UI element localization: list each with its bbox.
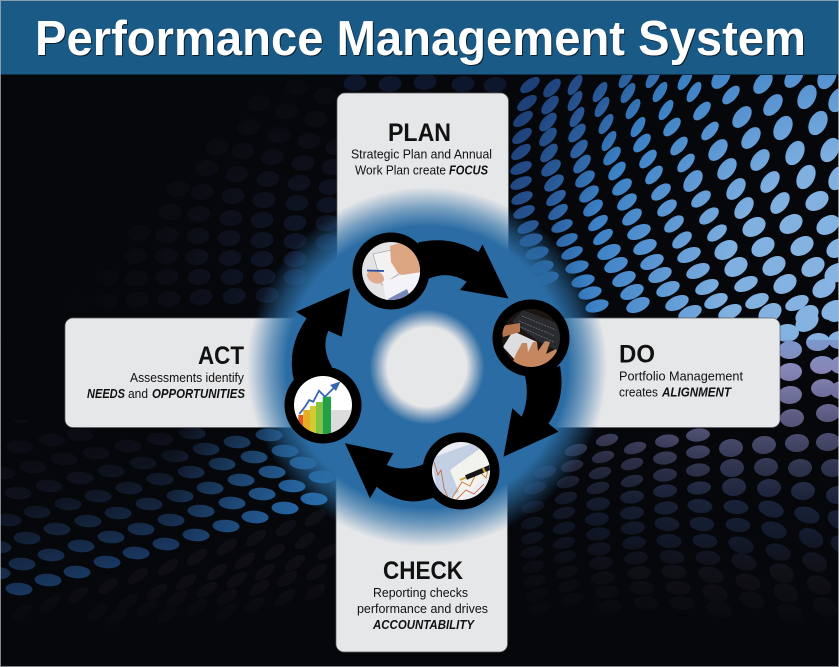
do text: Portfolio Management	[619, 370, 744, 384]
plan text: Work Plan create	[355, 164, 446, 178]
plan heading: PLAN	[388, 119, 451, 147]
photo: rising bar chart	[284, 366, 362, 444]
panel: do	[530, 318, 780, 428]
act text	[87, 371, 246, 401]
title: Performance Management System	[35, 12, 806, 66]
arrow: do to check	[504, 366, 562, 457]
title banner	[0, 0, 839, 74]
check text	[357, 586, 488, 632]
check heading: CHECK	[383, 557, 463, 585]
do text: creates	[619, 386, 658, 400]
act heading: ACT	[198, 342, 244, 370]
check text: performance and drives	[357, 602, 488, 616]
panel: plan	[337, 93, 508, 333]
photo: hands on keyboard	[492, 300, 570, 376]
do text	[619, 370, 744, 400]
cycle arrows	[292, 240, 562, 501]
check text: ACCOUNTABILITY	[372, 618, 476, 632]
do text: ALIGNMENT	[661, 386, 732, 400]
photo: person writing	[352, 232, 430, 310]
background dot pattern	[0, 75, 839, 596]
act text: NEEDS	[87, 387, 126, 401]
panel: check	[336, 420, 508, 652]
arrow: plan to do	[418, 240, 508, 298]
plan text	[351, 148, 492, 178]
act text: and	[128, 387, 148, 401]
panel: act	[65, 318, 315, 428]
do heading: DO	[619, 340, 655, 368]
act text: OPPORTUNITIES	[152, 387, 246, 401]
blue glow disc with white centre	[247, 187, 607, 547]
plan text: Strategic Plan and Annual	[351, 148, 492, 162]
arrow: check to act	[345, 443, 436, 501]
act text: Assessments identify	[130, 371, 245, 385]
plan text: FOCUS	[449, 164, 489, 178]
arrow: act to plan	[292, 288, 350, 381]
check text: Reporting checks	[373, 586, 468, 600]
photo: pen on chart report	[422, 432, 500, 510]
